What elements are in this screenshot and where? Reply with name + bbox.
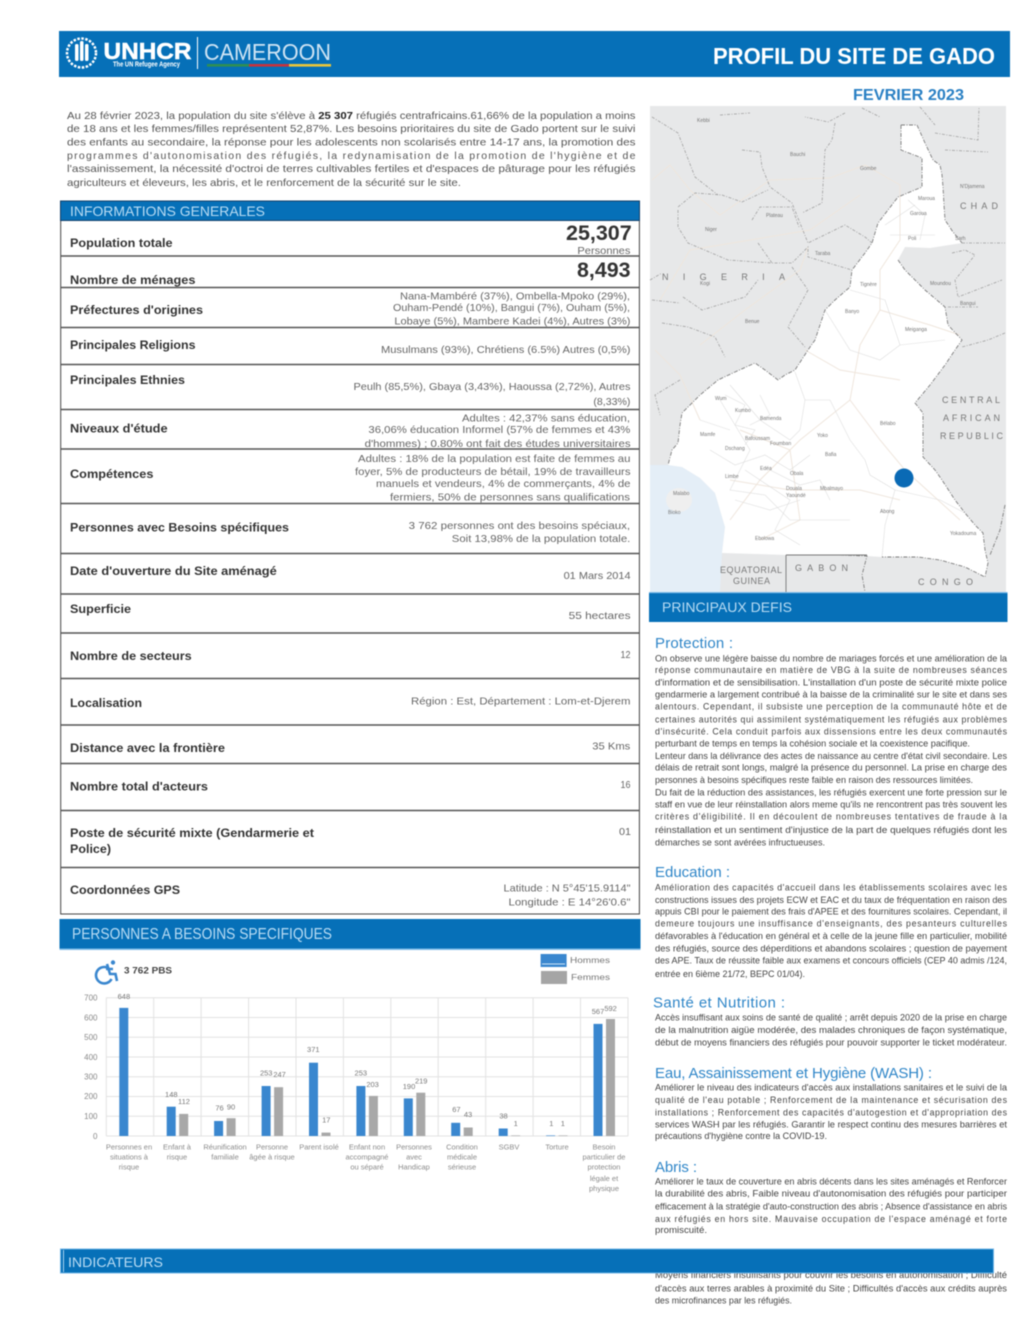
row labels: Niveaux d'étude (70, 422, 168, 436)
category labels: situations à (110, 1152, 149, 1162)
protection: démarches se sont avérées infructueuses. (655, 837, 825, 847)
abris: efficacement à la stratégie d'auto-construction des abris ; Absence d'assistance en abris (655, 1202, 1008, 1212)
data labels: 148 (165, 1090, 178, 1099)
category labels: protection (588, 1162, 620, 1172)
row values: fermiers, 50% de personnes sans qualifications (390, 492, 630, 504)
bars: femmes (179, 1019, 615, 1136)
protection: réponse communautaire en matière de VBG à la suite de nombreuses séances (655, 665, 1008, 675)
place names: Garoua (910, 211, 927, 217)
WASH: installations ; Renforcement des capacités d'autogestion et d'appropriation des (655, 1107, 1008, 1117)
education: entrée en 6ième 21/72, BEPC 01/04). (655, 969, 805, 979)
place names: Mbalmayo (820, 486, 843, 492)
y axis labels: 400 (84, 1053, 98, 1062)
abris: Améliorer le taux de couverture en abris décents dans les sites aménagés et Renforcer (655, 1177, 1007, 1187)
row labels: Police) (70, 842, 111, 856)
country labels: GUINEA (733, 576, 770, 586)
data labels: 371 (307, 1045, 320, 1054)
y axis labels: 500 (84, 1033, 98, 1042)
place names: Yoko (817, 433, 828, 439)
row labels: Localisation (70, 696, 142, 710)
row values: 36,06% éducation Informel (57% de femmes et 43% (368, 424, 630, 436)
place names: Moundou (930, 281, 951, 287)
row values: Nana-Mambéré (37%), Ombella-Mpoko (29%), (400, 290, 630, 302)
title: PROFIL DU SITE DE GADO (713, 43, 995, 69)
WASH: Eau, Assainissement et Hygiène (WASH) : (655, 1065, 932, 1082)
place names: Maroua (918, 196, 935, 202)
row labels: Coordonnées GPS (70, 883, 180, 897)
place names: Douala (786, 486, 802, 492)
education: défavorables à l'éducation en général et à celle de la jeune fille en particulier, mobilité (655, 931, 1007, 941)
data labels: 1 (561, 1119, 565, 1128)
sante et nutrition: de la malnutrition aigüe modérée, des malades chroniques de façon systématique, (655, 1025, 1007, 1035)
protection: Lenteur dans la délivrance des actes de naissance au centre d'état civil secondaire. Les (655, 751, 1008, 761)
data labels (118, 992, 617, 1128)
place names: Limbe (725, 474, 739, 480)
protection: Protection : (655, 635, 733, 652)
place names: Yokadouma (950, 531, 976, 537)
protection: réinstallation et un sentiment d'injustice de la part de quelques réfugiés dont les (655, 825, 1008, 835)
category labels: médicale (447, 1152, 477, 1162)
abris: promiscuité. (655, 1225, 707, 1235)
intro paragraph: Au 28 février 2023, la population du site s'élève à 25 307 réfugiés centrafricains.61,66% de la population a moins (67, 110, 636, 122)
row values: 16 (620, 779, 631, 791)
place names: Obala (790, 471, 804, 477)
section heading: indicateurs: INDICATEURS (68, 1254, 163, 1270)
country labels: REPUBLIC (940, 431, 1004, 441)
place names: Edéa (760, 466, 772, 472)
y axis labels: 600 (84, 1014, 98, 1022)
category labels: risque (119, 1162, 139, 1172)
category labels: Enfant à (163, 1142, 192, 1152)
place names: Foumban (770, 441, 791, 447)
y axis labels: 300 (84, 1072, 98, 1082)
row values: Lobaye (5%), Mambere Kadei (4%), Autres (3%) (394, 316, 630, 328)
abris: Abris : (655, 1159, 697, 1176)
country labels: CONGO (918, 577, 973, 587)
place names: Malabo (673, 491, 690, 497)
row values: 01 (619, 826, 631, 838)
data labels: 253 (260, 1068, 272, 1078)
row values: Personnes (577, 245, 630, 257)
row labels: Superficie (70, 602, 131, 616)
data labels: 67 (452, 1105, 461, 1114)
abris (655, 1159, 1008, 1235)
category labels: Personnes (396, 1142, 432, 1152)
section heading: personnes a besoins specifiques: PERSONNES A BESOINS SPECIFIQUES (72, 926, 332, 943)
y axis labels: 200 (84, 1092, 98, 1101)
place names: Ebolowa (755, 536, 774, 542)
row values: Musulmans (93%), Chrétiens (6.5%) Autres (0,5%) (381, 344, 630, 356)
WASH: précautions d'hygiène contre la COVID-19. (655, 1131, 827, 1141)
row labels: Poste de sécurité mixte (Gendarmerie et (70, 826, 314, 840)
data labels: 253 (355, 1068, 367, 1078)
panel: informations generales (60, 201, 640, 914)
place names: Poli (908, 236, 916, 242)
row labels: Nombre de secteurs (70, 649, 192, 663)
place names: Bauchi (790, 152, 805, 158)
row values: Soit 13,98% de la population totale. (452, 533, 630, 545)
data labels: 38 (499, 1112, 508, 1120)
place names: Bélabo (880, 421, 896, 427)
country labels: CENTRAL (942, 395, 1000, 405)
legend: Hommes (570, 956, 610, 965)
place names: Mamfe (700, 432, 716, 438)
row values: 35 Kms (592, 740, 630, 752)
category labels: physique (589, 1184, 619, 1193)
category labels: SGBV (499, 1142, 519, 1152)
row values: 8,493 (577, 259, 630, 282)
education: demeure toujours une insuffisance d'enseignants, des pesanteurs culturelles (655, 918, 1008, 928)
place names: Bangui (960, 301, 976, 307)
education: des réfugiés, source des déperditions et abandons scolaires ; question de payement (655, 943, 1008, 953)
autonomisation text: des microfinances par les réfugiés. (655, 1296, 792, 1306)
Cameroon territory (668, 125, 988, 577)
category labels: Torture (545, 1142, 569, 1152)
data labels: 43 (464, 1110, 472, 1119)
place names: Niger (705, 227, 717, 233)
data labels: 17 (322, 1116, 330, 1124)
place names: Kumbo (735, 408, 751, 414)
row labels (70, 236, 314, 897)
legend (541, 954, 610, 984)
education: Education : (655, 864, 730, 881)
section heading: informations generales: INFORMATIONS GENERALES (70, 203, 265, 219)
category labels: avec (406, 1152, 422, 1162)
intro paragraph: l'assainissement, la nécessité d'octroi de terres cultivables fertiles et d'espaces de pâturage pour les réfugiés (67, 163, 636, 175)
protection: délais de retrait sont longs, malgré la présence du personnel. La prise en charge des (655, 763, 1008, 773)
row labels: Population totale (70, 236, 173, 250)
autonomisation text: Moyens financiers insuffisants pour couvrir les besoins en autonomisation ; Difficulté (655, 1270, 1007, 1280)
place names: Plateau (766, 213, 783, 219)
sante et nutrition: début de moyens financiers des réfugiés pour pouvoir supporter le ticket modérateur. (655, 1037, 1007, 1047)
category labels: Personnes en (106, 1142, 152, 1152)
place names: Kebbi (697, 118, 710, 124)
category labels: Réunification (203, 1142, 247, 1152)
data labels: 76 (215, 1104, 224, 1112)
row labels: Principales Religions (70, 338, 196, 352)
data labels: 219 (415, 1076, 427, 1086)
place names: Bafoussam (745, 436, 770, 442)
protection: staff en vue de leur réinstallation alors meme qu'ils ne rencontrent pas très souvent les (655, 799, 1008, 809)
site marker: Gado (894, 468, 914, 488)
row labels: Compétences (70, 467, 154, 481)
data labels: 203 (366, 1080, 379, 1089)
y axis labels: 0 (93, 1132, 98, 1141)
row values: Longitude : E 14°26'0.6" (508, 896, 631, 908)
y axis labels: 100 (84, 1112, 98, 1121)
category labels: Parent isolé (299, 1142, 339, 1152)
protection: On observe une légère baisse du nombre de mariages forcés et une amélioration de la (655, 653, 1007, 663)
WASH: qualité de l'eau potable ; Renforcement de la maintenance et sécurisation des (655, 1095, 1008, 1105)
y axis labels (84, 994, 98, 1141)
icon: wheelchair (96, 960, 117, 983)
protection: certaines autorités qui assimilent systématiquement les réfugiés aux problèmes (655, 714, 1008, 724)
place names: Bafia (825, 452, 837, 458)
data labels: 648 (118, 992, 130, 1001)
bar chart: personnes a besoins specifiques (84, 954, 628, 1193)
category labels (106, 1142, 625, 1193)
place names: Yaoundé (786, 493, 806, 499)
row values: 25,307 (566, 222, 632, 245)
y axis labels: 700 (84, 994, 98, 1002)
protection: Du fait de la réduction des assistances, les réfugiés exercent une forte pression sur le (655, 788, 1007, 798)
protection: d'information et de sensibilisation. L'installation d'un poste de sécurité mixte police (655, 677, 1007, 687)
borders (650, 107, 1005, 415)
abris: aux réfugiés en hors site. Mauvaise occupation de l'espace aménagé et forte (655, 1214, 1007, 1224)
country labels: GABON (795, 563, 848, 573)
place names: Abong (880, 509, 895, 515)
education (655, 864, 1008, 979)
education: Amélioration des capacités d'accueil dans les établissements scolaires avec les (655, 883, 1008, 893)
row values: Adultes : 18% de la population est faite de femmes au (358, 453, 631, 465)
section heading: principaux defis (649, 592, 1008, 622)
place names (668, 118, 985, 542)
map: Cameroon location (650, 106, 1006, 592)
row values: 12 (620, 649, 631, 661)
sante et nutrition: Santé et Nutrition : (653, 994, 785, 1012)
row values: Région : Est, Département : Lom-et-Djerem (411, 696, 631, 708)
place names: Benue (745, 319, 760, 325)
intro paragraph: de 18 ans et les femmes/filles représentent 52,87%. Les besoins prioritaires du site de Gado portent sur le suivi (67, 123, 636, 135)
row values: 01 Mars 2014 (564, 570, 631, 582)
category labels: Besoin (593, 1142, 615, 1152)
row values: Peulh (85,5%), Gbaya (3,43%), Haoussa (2,72%), Autres (354, 381, 630, 393)
row labels: Préfectures d'origines (70, 303, 203, 317)
section heading: personnes a besoins specifiques (60, 919, 640, 950)
section heading: informations generales (60, 201, 640, 220)
place names: Taraba (815, 251, 831, 257)
education: des APE. Taux de réussite faible aux examens et concours officiels (CEP 40 admis /124, (655, 956, 1007, 966)
row values: manuels et vendeurs, 4% de commerçants, 4% de (376, 478, 631, 490)
protection (655, 635, 1008, 847)
category labels: risque (167, 1152, 187, 1162)
section heading: principaux defis: PRINCIPAUX DEFIS (662, 599, 792, 615)
row values: Latitude : N 5°45'15.9114" (504, 882, 631, 894)
country labels: AFRICAN (943, 413, 1000, 423)
category labels: Handicap (398, 1162, 430, 1172)
place names: Meiganga (905, 327, 927, 333)
row values: d'hommes) ; 0.80% ont fait des études universitaires (365, 438, 631, 450)
UNHCR logo: The UN Refugee Agency (113, 62, 180, 68)
place names: Sarh (955, 236, 966, 242)
category labels: légale et (590, 1174, 619, 1183)
WASH (655, 1065, 1008, 1141)
data labels: 112 (178, 1097, 190, 1106)
sante et nutrition (653, 994, 1007, 1047)
category labels: familiale (211, 1152, 239, 1162)
data labels: 567 (592, 1007, 604, 1016)
country labels (662, 201, 1004, 587)
row values: Adultes : 42,37% sans éducation, (462, 412, 630, 424)
place names: Banyo (845, 309, 859, 315)
protection: gendarmerie a largement contribué à la baisse de la criminalité sur le site et dans ses (655, 689, 1008, 699)
legend: Femmes (571, 973, 610, 982)
section heading: indicateurs (60, 1249, 994, 1273)
abris: la durabilité des abris, Faible niveau d'autonomisation des réfugiés pour participer (655, 1188, 1007, 1198)
category labels: Personne (256, 1142, 288, 1152)
sante et nutrition: Accès insuffisant aux soins de santé de qualité ; arrêt depuis 2020 de la prise en charge (655, 1012, 1007, 1022)
protection: personnes à besoins spécifiques reste faible en raison des ressources limitées. (655, 775, 973, 785)
protection: critères d'éligibilité. Il en découlent de nombreuses tentatives de fraude à la (655, 812, 1007, 822)
place names: Kogi (700, 281, 710, 287)
category labels: Enfant non (349, 1142, 385, 1152)
place names: Bamenda (760, 416, 782, 422)
intro paragraph: agriculteurs et éleveurs, les abris, et le renforcement de la sécurité sur le site. (67, 177, 461, 189)
row values: 55 hectares (569, 610, 631, 622)
place names: Bioko (668, 510, 681, 516)
row values (354, 222, 632, 908)
PBS total: 3 762 PBS (124, 966, 172, 976)
data labels: 90 (227, 1102, 235, 1112)
row labels: Personnes avec Besoins spécifiques (70, 521, 289, 535)
category labels: âgée à risque (249, 1152, 295, 1162)
header banner (59, 31, 1010, 77)
country name and flag stripe: CAMEROON (204, 39, 331, 65)
ocean (650, 465, 725, 592)
row labels: Distance avec la frontière (70, 741, 225, 755)
bars: hommes (119, 1008, 603, 1136)
WASH: services WASH par les réfugiés. Garantir le respect continu des mesures barrières et (655, 1119, 1008, 1129)
row labels: Date d'ouverture du Site aménagé (70, 564, 277, 578)
category labels: ou séparé (350, 1162, 384, 1172)
place names: Wum (715, 396, 727, 402)
data labels: 1 (549, 1119, 553, 1128)
UNHCR logo: UNHCR (104, 38, 192, 64)
data labels: 190 (403, 1082, 415, 1091)
country labels: CHAD (960, 201, 998, 211)
education: constructions issues des projets ECW et EAC et du taux de fréquentation en raison des (655, 895, 1008, 905)
row values: 3 762 personnes ont des besoins spéciaux, (409, 520, 630, 532)
category labels: particulier de (583, 1152, 625, 1162)
data labels: 592 (604, 1004, 617, 1013)
protection: perturbant de temps en temps la cohésion sociale et la coexistence pacifique. (655, 738, 970, 748)
place names: Tignère (860, 282, 877, 288)
row labels: Nombre de ménages (70, 273, 196, 287)
place names: Gombe (860, 166, 877, 172)
row values: Ouham-Pendé (10%), Bangui (7%), Ouham (5%), (393, 302, 630, 314)
date: FEVRIER 2023 (853, 87, 964, 104)
protection: alentours. Cependant, il subsiste une perception de la communauté hôte et de (655, 702, 1007, 712)
country labels: NIGERIA (662, 272, 785, 282)
WASH: Améliorer le niveau des indicateurs d'accès aux installations sanitaires et le suivi de la (655, 1083, 1007, 1093)
intro paragraph: des enfants au secondaire, la réponse pour les adolescents non scolarisés entre 14-17 ans, la promotion des (67, 136, 636, 148)
autonomisation text: d'accès aux terres arables à proximité du Site ; Difficultés d'accès aux crédits auprès (655, 1283, 1008, 1293)
education: appuis CBI pour le paiement des frais d'APEE et des fournitures scolaires. Cependant, il (655, 907, 1007, 917)
data labels: 1 (514, 1119, 518, 1128)
row labels: Principales Ethnies (70, 373, 185, 387)
data labels: 247 (273, 1070, 286, 1079)
autonomisation text (655, 1270, 1008, 1306)
row labels: Nombre total d'acteurs (70, 780, 208, 794)
category labels: accompagné (346, 1152, 388, 1162)
panel: principaux defis text (653, 635, 1008, 1306)
place names: N'Djamena (960, 184, 985, 190)
intro paragraph (67, 110, 636, 189)
category labels: Condition (446, 1142, 478, 1152)
country labels: EQUATORIAL (720, 565, 782, 575)
intro paragraph: programmes d'autonomisation des réfugiés, la redynamisation de la promotion de l'hygiène et de (67, 150, 636, 162)
row values: foyer, 5% de producteurs de bétail, 19% de travailleurs (355, 466, 630, 478)
protection: d'insécurité. Cela conduit parfois aux dissensions entre les deux communautés (655, 727, 1008, 737)
category labels: sérieuse (448, 1162, 476, 1172)
place names: Dschang (725, 446, 745, 452)
row values: (8,33%) (593, 396, 630, 408)
UNHCR logo (67, 37, 198, 69)
